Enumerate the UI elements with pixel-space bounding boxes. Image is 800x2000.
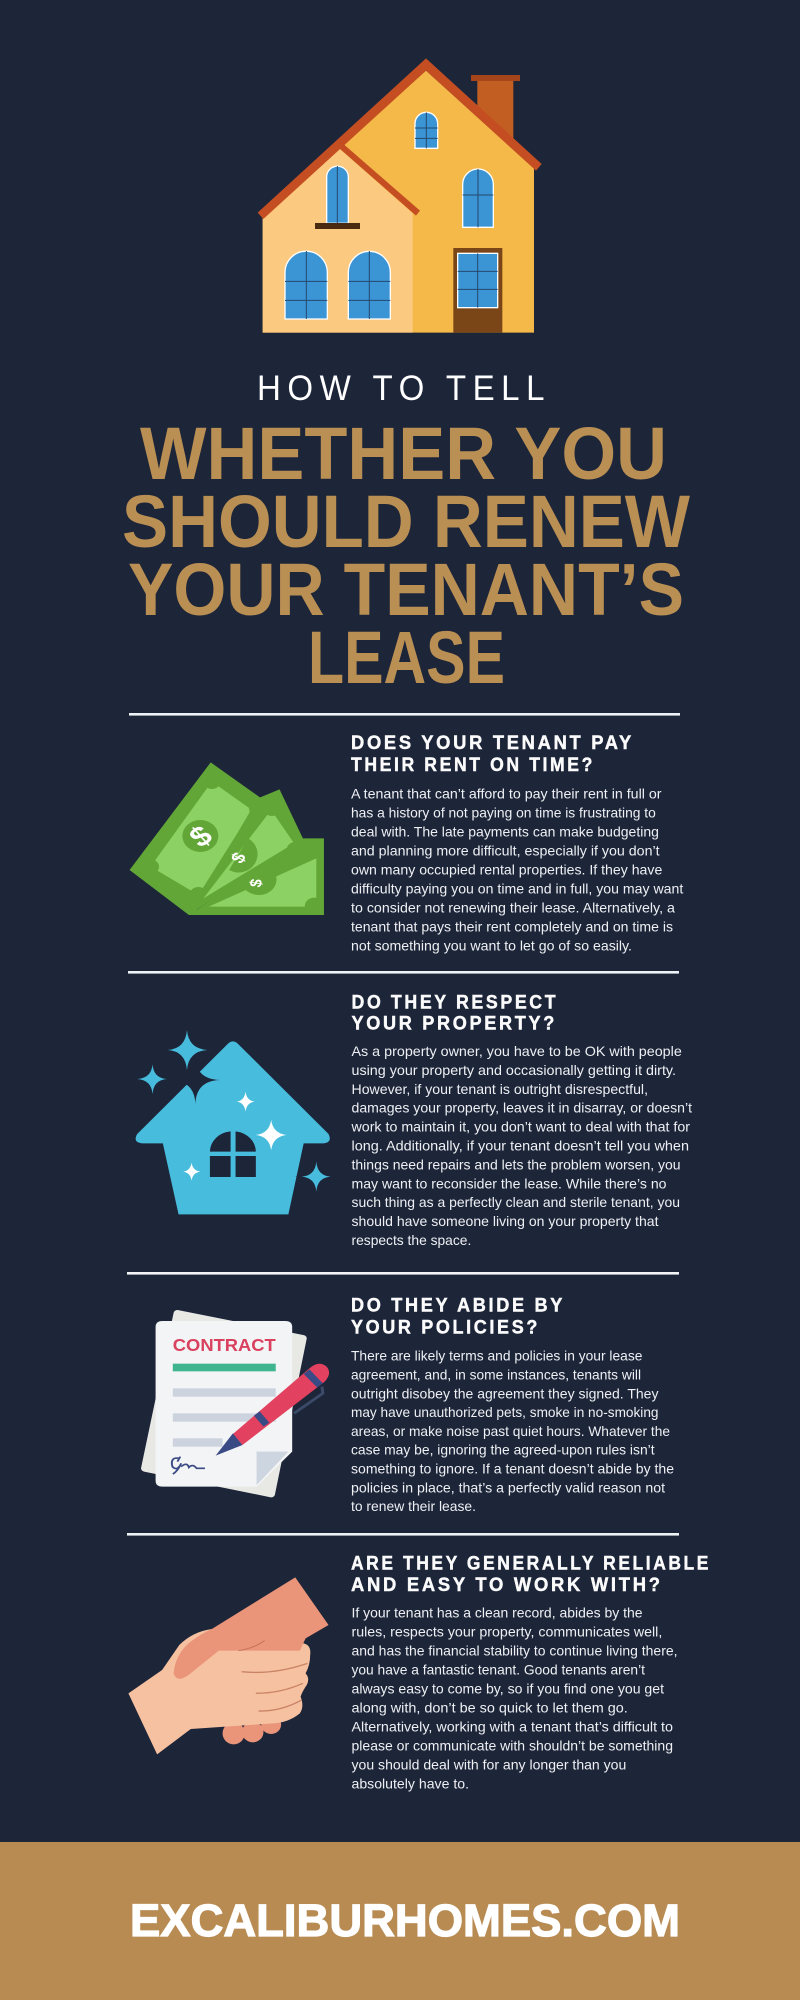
text block: respect property: using your property and occasionally getting it dirty.	[352, 1062, 676, 1078]
icon: handshake	[128, 1577, 329, 1754]
icon: green money bills: $	[227, 849, 250, 867]
text block: abide by policies: to renew their lease.	[351, 1498, 476, 1514]
text block: reliable and easy: rules, respects your property, communicates well,	[352, 1623, 662, 1639]
heading: main title: LEASE	[308, 616, 505, 699]
text block: rent on time: has a history of not paying on time is frustrating to	[351, 804, 656, 820]
text block: respect property: may want to reconsider the lease. While there’s no	[352, 1175, 667, 1191]
heading: rent on time: DOES YOUR TENANT PAY	[351, 733, 634, 754]
text block: abide by policies: something to ignore. If a tenant doesn’t abide by the	[351, 1460, 674, 1476]
text block: abide by policies: policies in place, that’s a perfectly valid reason not	[351, 1479, 665, 1495]
icon: sparkling blue house	[136, 1030, 338, 1214]
text block: rent on time: and planning more difficult, especially if you don’t	[351, 842, 660, 858]
text block: rent on time: deal with. The late payments can make budgeting	[351, 823, 659, 839]
text block: reliable and easy: If your tenant has a clean record, abides by the	[352, 1604, 643, 1620]
text block: abide by policies: agreement, and, in some instances, tenants will	[351, 1366, 641, 1382]
text block: respect property: As a property owner, you have to be OK with people	[352, 1043, 682, 1059]
text block: respect property: long. Additionally, if your tenant doesn’t tell you when	[352, 1138, 689, 1154]
heading: reliable and easy: ARE THEY GENERALLY RELIABLE	[351, 1553, 711, 1574]
text block: reliable and easy	[352, 1604, 678, 1791]
text block: abide by policies	[351, 1348, 674, 1514]
text block: reliable and easy: Alternatively, working with a tenant that’s difficult to	[352, 1718, 673, 1734]
heading: respect property: DO THEY RESPECT	[352, 992, 558, 1013]
panel: rent on time	[130, 733, 683, 954]
text block: respect property	[350, 1043, 692, 1248]
text block: reliable and easy: please or communicate with shouldn’t be something	[352, 1737, 673, 1753]
text block: respect property: things need repairs and lets the problem worsen, you	[352, 1156, 681, 1172]
panel: reliable and easy	[128, 1553, 711, 1791]
text: website: EXCALIBURHOMES.COM	[130, 1895, 680, 1946]
text block: reliable and easy: and has the financial stability to continue living there,	[352, 1642, 678, 1658]
icon: green money bills: $	[183, 820, 219, 854]
text block: rent on time: own many occupied rental properties. If they have	[351, 862, 663, 878]
text block: rent on time: tenant that pays their rent completely and on time is	[351, 919, 673, 935]
text block: respect property: such thing as a perfectly clean and sterile tenant, you	[352, 1194, 680, 1210]
heading: abide by policies: DO THEY ABIDE BY	[351, 1296, 565, 1317]
text block: rent on time: not something you want to let go of so easily.	[351, 938, 632, 954]
text block: abide by policies: case may be, ignoring the agreed-upon rules isn’t	[351, 1442, 655, 1458]
text block: respect property: work to maintain it, you don’t want to deal with that for	[350, 1119, 690, 1135]
text block: abide by policies: outright disobey the agreement they signed. They	[351, 1385, 658, 1401]
text block: abide by policies: There are likely terms and policies in your lease	[351, 1348, 643, 1364]
text block: respect property: respects the space.	[352, 1232, 471, 1248]
icon: green money bills	[130, 762, 324, 915]
heading: reliable and easy	[351, 1553, 711, 1596]
heading: rent on time: THEIR RENT ON TIME?	[351, 755, 595, 776]
text block: reliable and easy: along with, don’t be so quick to let them go.	[352, 1699, 628, 1715]
text block: reliable and easy: absolutely have to.	[352, 1775, 469, 1791]
text block: abide by policies: areas, or make noise past quiet hours. Whatever the	[351, 1423, 670, 1439]
text block: reliable and easy: you have a fantastic tenant. Good tenants aren’t	[352, 1661, 645, 1677]
text block: rent on time	[351, 785, 683, 954]
text block: reliable and easy: always easy to come by, so if you find one you get	[352, 1680, 664, 1696]
panel: respect property	[136, 992, 692, 1248]
text block: respect property: damages your property, leaves it in disarray, or doesn’t	[352, 1100, 692, 1116]
heading: abide by policies	[351, 1296, 565, 1338]
icon: contract and pen	[145, 1313, 329, 1494]
heading: respect property: YOUR PROPERTY?	[352, 1013, 557, 1034]
heading: main title	[122, 412, 690, 699]
panel: abide by policies	[145, 1296, 674, 1514]
text block: rent on time: A tenant that can’t afford to pay their rent in full or	[351, 785, 662, 801]
text block: reliable and easy: you should deal with for any longer than you	[352, 1756, 626, 1772]
icon: house illustration	[258, 58, 542, 333]
heading: main title: WHETHER YOU	[140, 412, 667, 495]
heading: respect property	[352, 992, 558, 1034]
footer band	[0, 1842, 800, 2000]
text block: abide by policies: may have unauthorized pets, smoke in no-smoking	[351, 1404, 658, 1420]
heading: reliable and easy: AND EASY TO WORK WITH?	[351, 1575, 663, 1596]
text block: respect property: However, if your tenant is outright disrespectful,	[352, 1081, 648, 1097]
heading: rent on time	[351, 733, 634, 776]
text block: respect property: should have someone living on your property that	[352, 1213, 659, 1229]
text block: rent on time: to consider not renewing their lease. Alternatively, a	[351, 900, 675, 916]
text block: rent on time: difficulty paying you on time and in full, you may want	[351, 881, 683, 897]
heading: abide by policies: YOUR POLICIES?	[351, 1317, 540, 1338]
text: contract: CONTRACT	[173, 1335, 276, 1355]
icon: green money bills: $	[247, 878, 267, 889]
heading: main title: YOUR TENANT’S	[128, 548, 684, 631]
title: how to tell: HOW TO TELL	[257, 368, 551, 408]
heading: main title: SHOULD RENEW	[122, 480, 690, 563]
